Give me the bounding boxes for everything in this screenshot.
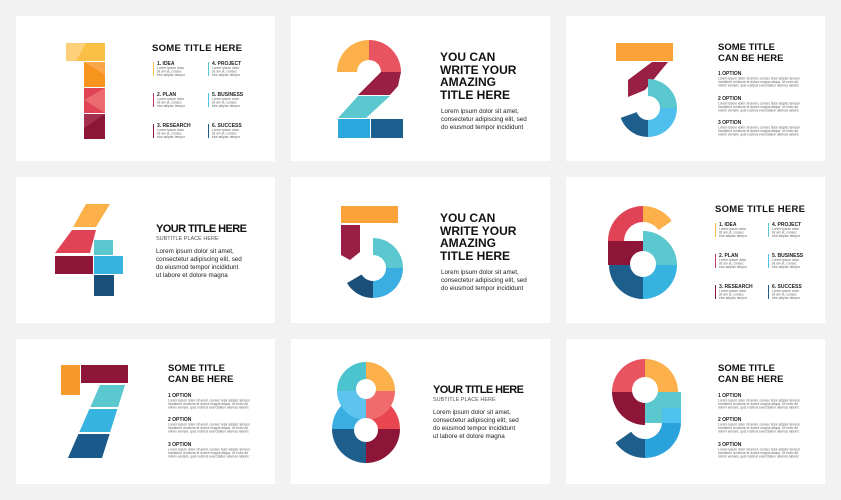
list items: sit am et, consec [212,70,237,74]
options: incididunt ut labore et dolore magna aliqua. Ut enim ad [168,426,248,430]
options [718,71,801,136]
options: minim veniam, quis nostrud exercitation ullamco laboris [718,108,799,112]
list items: sit am et, consec [772,262,797,266]
list items: etur adipisc tempor [719,265,748,269]
list items: Lorem ipsum dolor [212,66,240,70]
list items: etur adipisc tempor [157,135,186,139]
list items: sit am et, consec [772,292,797,296]
title: WRITE YOUR [440,224,517,238]
subtitle: SUBTITLE PLACE HERE [156,236,219,242]
title: TITLE HERE [440,88,510,102]
title: YOUR TITLE HERE [433,384,524,396]
text block [433,409,519,440]
list items: Lorem ipsum dolor [772,227,800,231]
list items: 1. IDEA [157,61,175,67]
title: CAN BE HERE [718,53,783,64]
options: Lorem ipsum dolor sit amet, consec tetur adipisc tempor [718,76,801,80]
icon: numeral 5 [341,206,403,298]
panel: card 6 [566,177,825,323]
text block: Lorem ipsum dolor sit amet, [441,108,519,115]
title [440,211,517,263]
list items: sit am et, consec [157,132,182,136]
list items: 3. RESEARCH [157,123,191,129]
options: incididunt ut labore et dolore magna aliqua. Ut enim ad [718,80,798,84]
list items: etur adipisc tempor [212,73,241,77]
text block [441,108,527,131]
title: CAN BE HERE [168,374,233,385]
text block [441,269,527,292]
options: minim veniam, quis nostrud exercitation ullamco laboris [168,454,249,458]
title: SOME TITLE [168,363,225,374]
options: 2 OPTION [718,96,742,102]
list items: Lorem ipsum dolor [157,128,185,132]
list items: sit am et, consec [719,230,744,234]
list items: 1. IDEA [719,222,737,228]
title: YOU CAN [440,50,495,64]
text block: ut labore et dolore magna [156,272,228,279]
list items: etur adipisc tempor [212,104,241,108]
icon: numeral 4 [55,204,123,296]
panel: card 8 [291,339,550,484]
options: 3 OPTION [168,442,192,448]
options: 1 OPTION [168,393,192,399]
panel: card 3 [566,16,825,161]
list items: Lorem ipsum dolor [772,289,800,293]
options: incididunt ut labore et dolore magna aliqua. Ut enim ad [168,451,248,455]
options: 3 OPTION [718,442,742,448]
options: incididunt ut labore et dolore magna aliqua. Ut enim ad [718,426,798,430]
icon: numeral 9 [612,359,681,458]
list items: etur adipisc tempor [772,265,801,269]
text block: Lorem ipsum dolor sit amet, [433,409,511,416]
list items: sit am et, consec [719,292,744,296]
list items: 3. RESEARCH [719,284,753,290]
title: AMAZING [440,75,496,89]
panel: card 7 [16,339,275,484]
text block [156,248,242,279]
list items: 5. BUSINESS [772,253,804,259]
icon: numeral 7 [61,365,128,458]
options: 1 OPTION [718,393,742,399]
options [168,393,251,458]
title [440,50,517,102]
title [718,42,783,64]
options: 1 OPTION [718,71,742,77]
title: SOME TITLE HERE [152,43,242,54]
options: incididunt ut labore et dolore magna aliqua. Ut enim ad [718,105,798,109]
options: minim veniam, quis nostrud exercitation ullamco laboris [168,430,249,434]
list items: etur adipisc tempor [719,296,748,300]
options: Lorem ipsum dolor sit amet, consec tetur adipisc tempor [718,126,801,130]
list items: etur adipisc tempor [212,135,241,139]
panel: card 5 [291,177,550,323]
list items: 2. PLAN [157,92,177,98]
title: SOME TITLE HERE [715,204,805,215]
list items [715,222,804,300]
title: CAN BE HERE [718,374,783,385]
panel: card 2 [291,16,550,161]
text block: consectetur adipiscing elit, sed [156,256,242,263]
options [718,393,801,458]
options: minim veniam, quis nostrud exercitation ullamco laboris [168,406,249,410]
options: Lorem ipsum dolor sit amet, consec tetur adipisc tempor [718,448,801,452]
list items: Lorem ipsum dolor [772,258,800,262]
options: 2 OPTION [168,417,192,423]
list items: Lorem ipsum dolor [212,97,240,101]
options: minim veniam, quis nostrud exercitation ullamco laboris [718,84,799,88]
icon: numeral 8 [332,362,400,463]
list items: Lorem ipsum dolor [212,128,240,132]
options: minim veniam, quis nostrud exercitation ullamco laboris [718,132,799,136]
options: incididunt ut labore et dolore magna aliqua. Ut enim ad [718,402,798,406]
list items: 2. PLAN [719,253,739,259]
options: Lorem ipsum dolor sit amet, consec tetur adipisc tempor [168,398,251,402]
title [718,363,783,385]
options: minim veniam, quis nostrud exercitation ullamco laboris [718,406,799,410]
list items: Lorem ipsum dolor [719,289,747,293]
title [168,363,233,385]
subtitle: SUBTITLE PLACE HERE [433,397,496,403]
options: minim veniam, quis nostrud exercitation ullamco laboris [718,430,799,434]
text block: do eiusmod tempor incididunt [441,124,524,131]
icon: numeral 3 [616,43,677,137]
text block: do eiusmod tempor incididunt [441,285,524,292]
options: incididunt ut labore et dolore magna aliqua. Ut enim ad [168,402,248,406]
list items: etur adipisc tempor [157,73,186,77]
options: 3 OPTION [718,120,742,126]
options: Lorem ipsum dolor sit amet, consec tetur adipisc tempor [168,448,251,452]
icon: numeral 2 [337,40,403,138]
text block: do eiusmod tempor incididunt [433,425,516,432]
list items: Lorem ipsum dolor [719,258,747,262]
options: Lorem ipsum dolor sit amet, consec tetur adipisc tempor [168,422,251,426]
title: SOME TITLE [718,42,775,53]
list items: sit am et, consec [212,132,237,136]
list items: etur adipisc tempor [157,104,186,108]
list items: sit am et, consec [719,262,744,266]
list items: etur adipisc tempor [772,296,801,300]
icon: numeral 6 [608,206,677,299]
icon: numeral 1 [66,43,105,139]
list items: 4. PROJECT [772,222,801,228]
options: Lorem ipsum dolor sit amet, consec tetur adipisc tempor [718,398,801,402]
text block: Lorem ipsum dolor sit amet, [156,248,234,255]
list items: etur adipisc tempor [772,234,801,238]
list items: 6. SUCCESS [212,123,242,129]
text block: Lorem ipsum dolor sit amet, [441,269,519,276]
options: Lorem ipsum dolor sit amet, consec tetur adipisc tempor [718,422,801,426]
options: 2 OPTION [718,417,742,423]
list items: Lorem ipsum dolor [719,227,747,231]
text block: ut labore et dolore magna [433,433,505,440]
list items: sit am et, consec [772,230,797,234]
list items: sit am et, consec [157,70,182,74]
list items [153,61,244,139]
list items: 4. PROJECT [212,61,241,67]
panel: card 4 [16,177,275,323]
list items: sit am et, consec [212,100,237,104]
title: AMAZING [440,236,496,250]
title: TITLE HERE [440,249,510,263]
list items: Lorem ipsum dolor [157,97,185,101]
options: incididunt ut labore et dolore magna aliqua. Ut enim ad [718,129,798,133]
options: Lorem ipsum dolor sit amet, consec tetur adipisc tempor [718,102,801,106]
panel: card 1 [16,16,275,161]
options: incididunt ut labore et dolore magna aliqua. Ut enim ad [718,451,798,455]
title: SOME TITLE [718,363,775,374]
title: WRITE YOUR [440,63,517,77]
list items: sit am et, consec [157,100,182,104]
list items: Lorem ipsum dolor [157,66,185,70]
title: YOU CAN [440,211,495,225]
text block: do eiusmod tempor incididunt [156,264,239,271]
panel: card 9 [566,339,825,484]
title: YOUR TITLE HERE [156,223,247,235]
text block: consectetur adipiscing elit, sed [441,116,527,123]
options: minim veniam, quis nostrud exercitation ullamco laboris [718,454,799,458]
list items: etur adipisc tempor [719,234,748,238]
text block: consectetur adipiscing elit, sed [433,417,519,424]
list items: 5. BUSINESS [212,92,244,98]
list items: 6. SUCCESS [772,284,802,290]
text block: consectetur adipiscing elit, sed [441,277,527,284]
